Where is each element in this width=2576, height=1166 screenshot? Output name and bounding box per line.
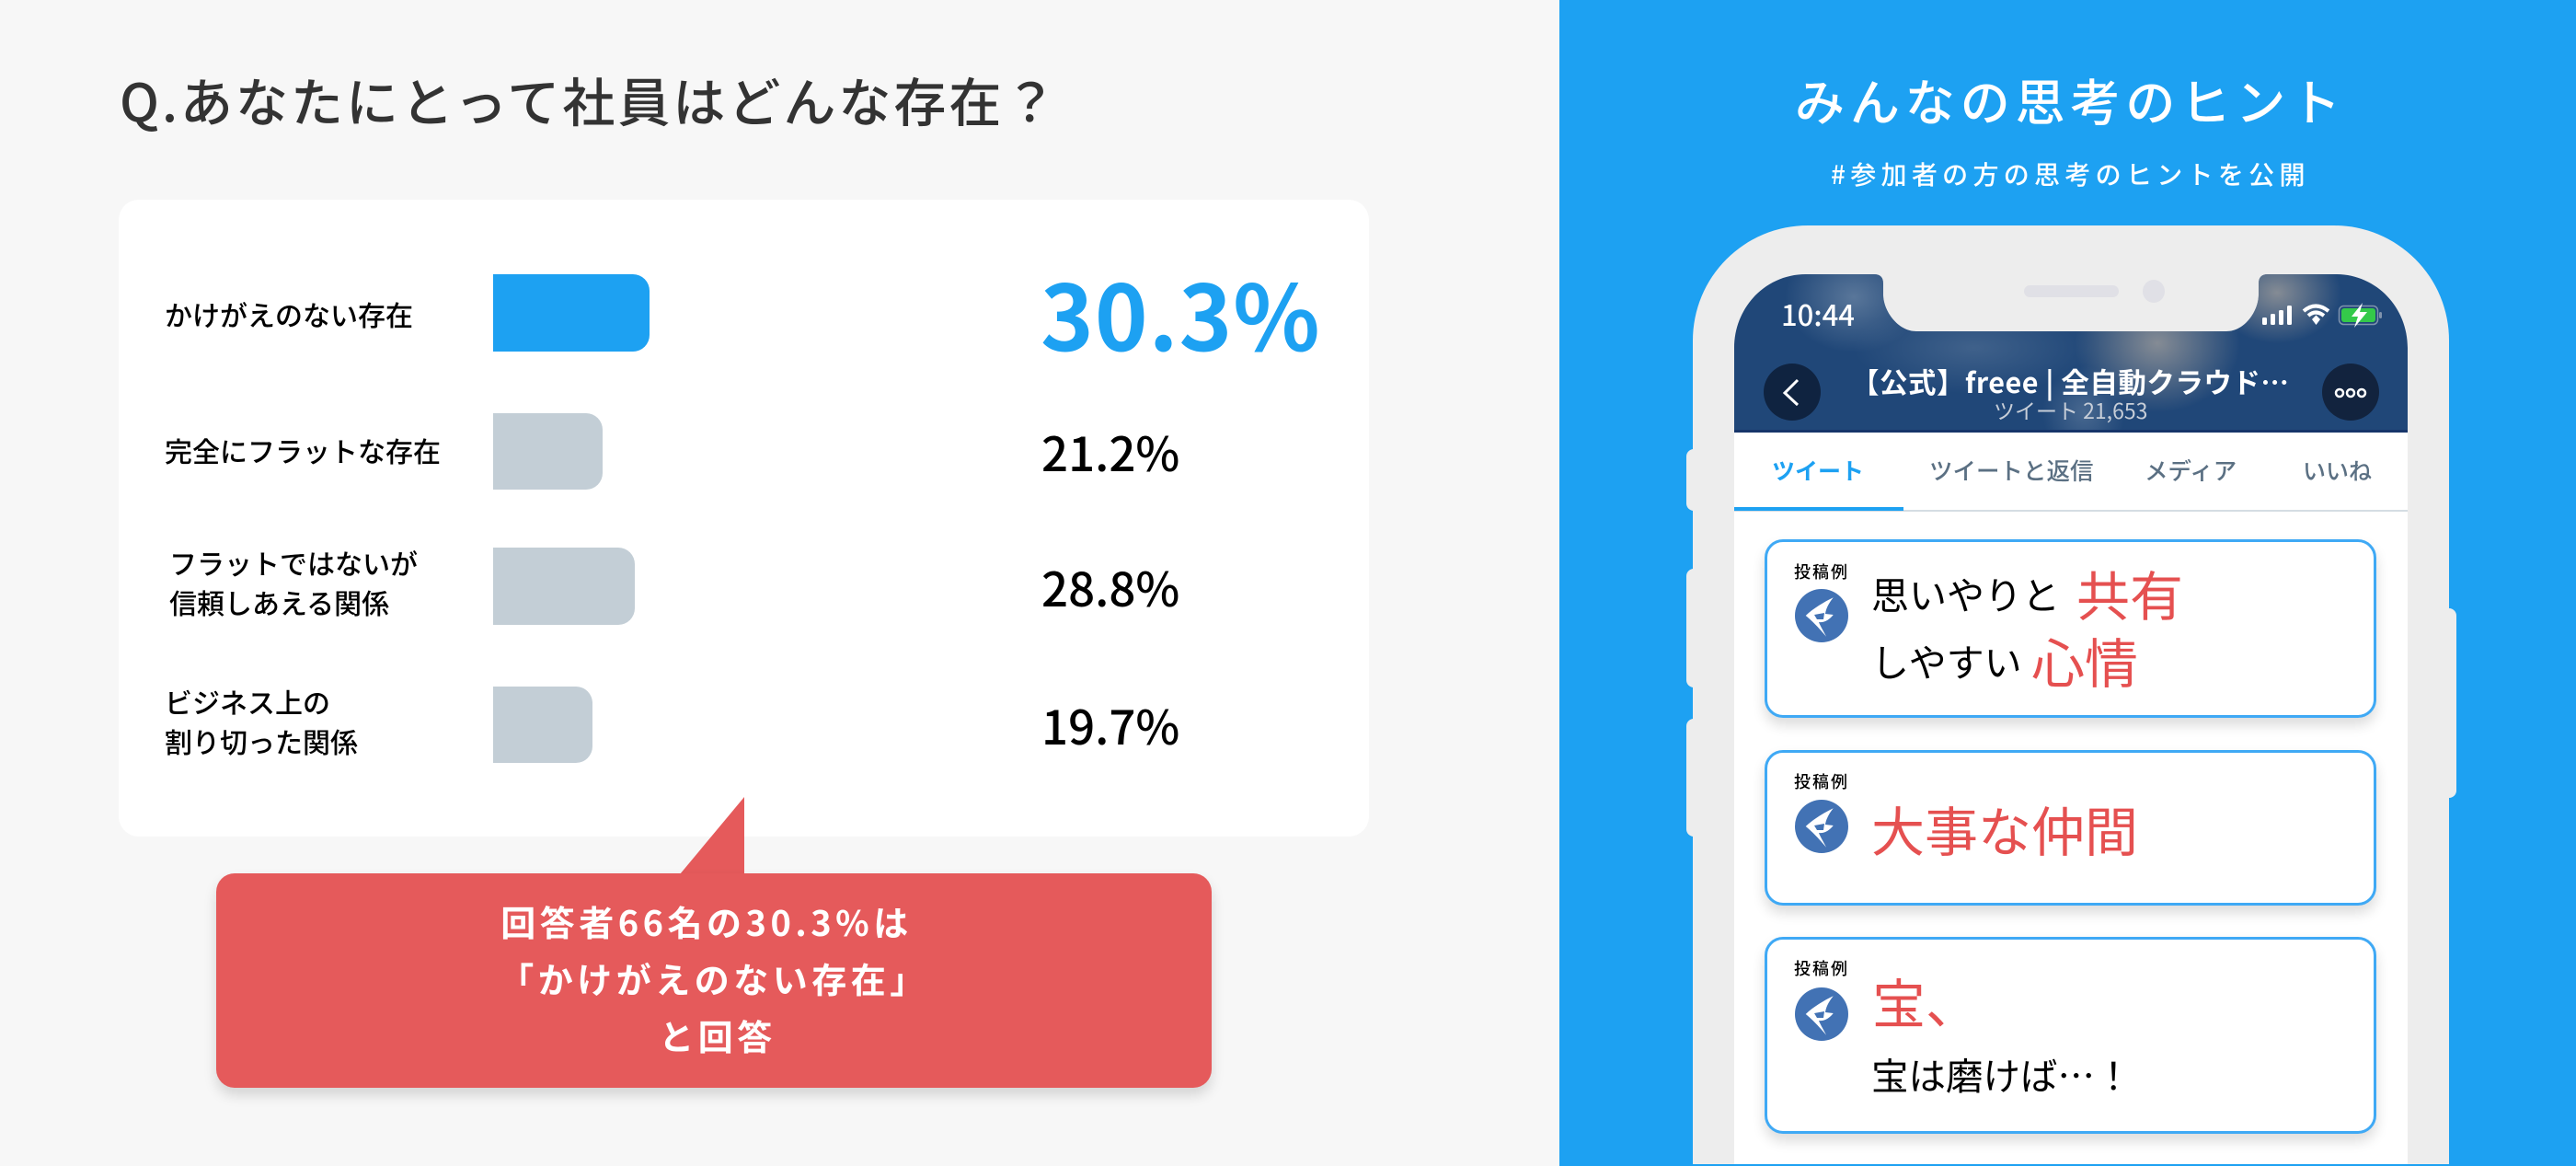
callout text: と回答 bbox=[659, 1010, 776, 1060]
row label: business relationship bbox=[165, 681, 358, 761]
status time: 10:44 bbox=[1781, 293, 1855, 334]
highlighted word: feeling: 心情 bbox=[2031, 621, 2138, 698]
icon: three dots bbox=[2335, 388, 2366, 398]
bar: 21.2% bbox=[493, 413, 603, 490]
callout text bbox=[499, 895, 929, 1060]
callout text: 回答者66名の30.3%は bbox=[500, 895, 913, 946]
post text line 2: しやすい bbox=[1871, 632, 2022, 687]
bottom edge line bbox=[1693, 1164, 2449, 1166]
post text line 1: 思いやりと bbox=[1871, 565, 2060, 620]
more button bbox=[2322, 364, 2379, 421]
sample label: 投稿例 bbox=[1794, 560, 1849, 583]
phone screen white area bbox=[1734, 432, 2408, 1164]
notch camera bbox=[2143, 280, 2165, 303]
phone body bbox=[1693, 225, 2449, 1164]
post card 3 bbox=[1765, 937, 2376, 1134]
post text: 宝は磨けば…！ bbox=[1871, 1046, 2133, 1101]
icon: avatar bbox=[1795, 987, 1848, 1041]
callout tail bbox=[681, 797, 744, 873]
account name: 【公式】freee | 全自動クラウド… bbox=[1851, 361, 2289, 401]
phone mockup bbox=[1686, 225, 2456, 1164]
status icons: signal, wifi, battery bbox=[2262, 303, 2382, 328]
tab: tweets and replies: ツイートと返信 bbox=[1929, 453, 2094, 487]
panel: results card bbox=[119, 200, 1369, 837]
highlighted text: valued colleague: 大事な仲間 bbox=[1871, 790, 2138, 867]
left section: survey question bbox=[0, 0, 1559, 1166]
right subheading: #参加者の方の思考のヒントを公開 bbox=[1831, 156, 2310, 192]
sample label: 投稿例 bbox=[1794, 956, 1849, 980]
phone side buttons bbox=[1686, 449, 2456, 837]
bar: 28.8% bbox=[493, 548, 635, 625]
bar: 30.3% bbox=[493, 274, 650, 352]
row label: business relationship: ビジネス上の bbox=[165, 681, 330, 722]
value: 28.8%: 28.8% bbox=[1041, 552, 1179, 620]
right section: blue panel bbox=[1559, 0, 2576, 1166]
value: 21.2%: 21.2% bbox=[1041, 417, 1179, 485]
highlighted word: share: 共有 bbox=[2076, 554, 2183, 631]
right heading: みんなの思考のヒント bbox=[1795, 63, 2346, 135]
post card 1 bbox=[1765, 539, 2376, 718]
title: question heading: Q.あなたにとって社員はどんな存在？ bbox=[120, 62, 1059, 137]
icon: avatar bbox=[1795, 800, 1848, 853]
callout body bbox=[216, 873, 1212, 1088]
tab underline bbox=[1734, 507, 2408, 512]
icon: avatar bbox=[1795, 589, 1848, 642]
tab: tweets active: ツイート bbox=[1772, 454, 1864, 487]
row label: business relationship: 割り切った関係 bbox=[165, 721, 358, 761]
bar: 19.7% bbox=[493, 687, 592, 763]
tab: media: メディア bbox=[2145, 453, 2237, 487]
value: 19.7%: 19.7% bbox=[1041, 690, 1179, 758]
row label: trust relationship bbox=[169, 542, 418, 622]
callout text: 「かけがえのない存在」 bbox=[499, 952, 929, 1003]
tab: likes: いいね bbox=[2303, 454, 2372, 487]
sample label: 投稿例 bbox=[1794, 769, 1849, 793]
row label: irreplaceable: かけがえのない存在 bbox=[165, 294, 413, 334]
back button bbox=[1764, 364, 1821, 421]
row label: completely flat: 完全にフラットな存在 bbox=[165, 430, 441, 470]
app header with notch bbox=[1734, 274, 2408, 433]
value: 30.3%: 30.3% bbox=[1041, 247, 1321, 377]
highlighted word: treasure: 宝、 bbox=[1872, 962, 1979, 1039]
tweet count: ツイート 21,653 bbox=[1994, 394, 2147, 425]
post card 2 bbox=[1765, 750, 2376, 906]
row label: trust relationship: フラットではないが bbox=[169, 542, 418, 583]
icon: chevron bbox=[1783, 379, 1799, 407]
notch speaker bbox=[2024, 285, 2119, 297]
callout: red speech bubble bbox=[212, 797, 1216, 1099]
row label: trust relationship: 信頼しあえる関係 bbox=[169, 582, 389, 622]
